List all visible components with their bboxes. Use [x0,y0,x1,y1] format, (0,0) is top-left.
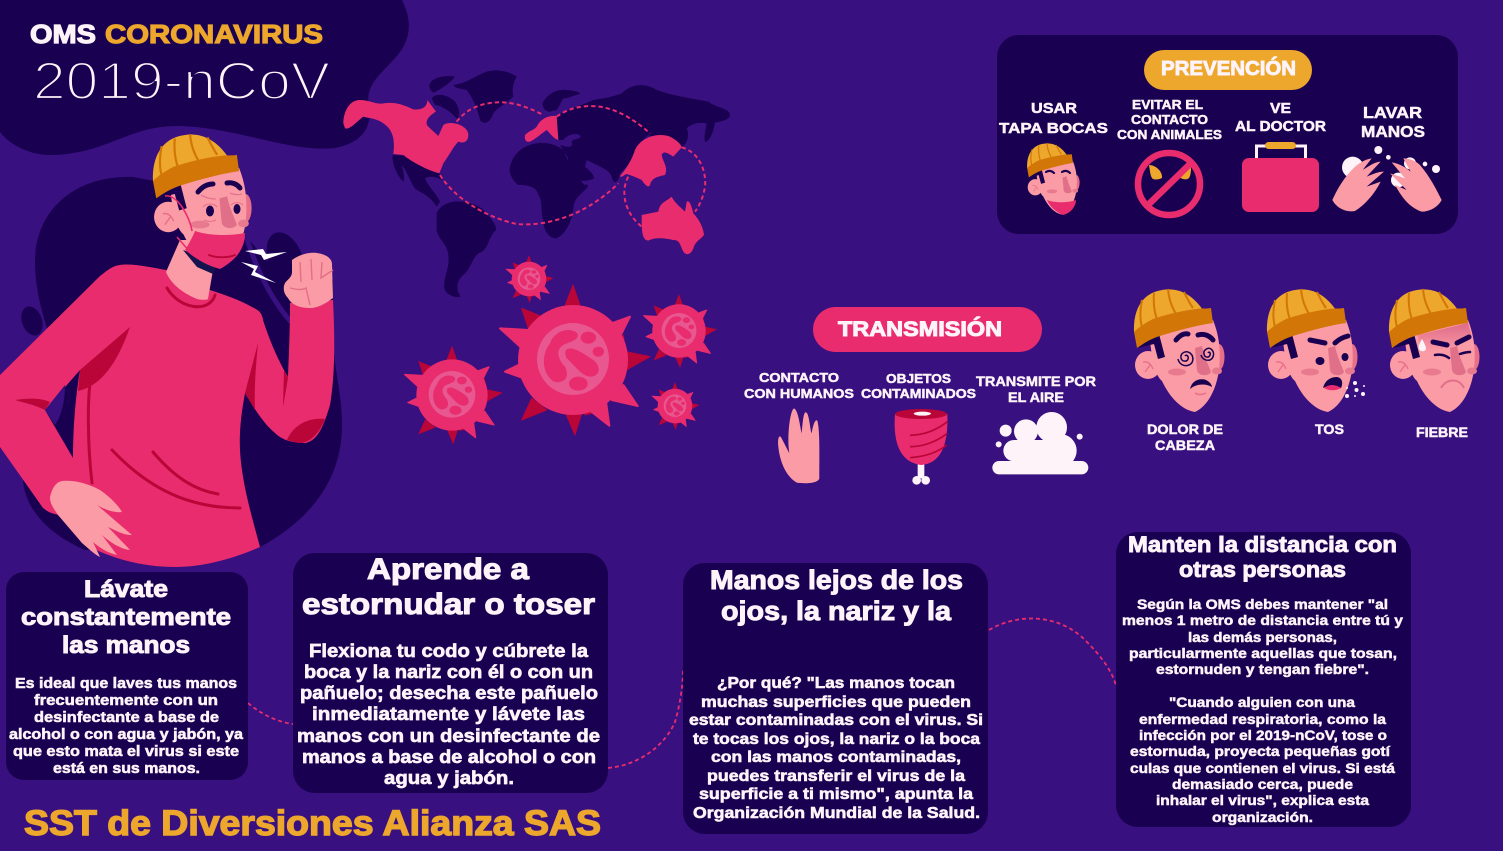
body text: "Cuando alguien con una [1169,694,1355,710]
dashed routes [440,102,705,227]
heading: ojos, la nariz y la [721,596,952,626]
panel: lávate las manos [6,572,248,780]
evitar contacto con animales [1117,97,1222,215]
footer credit: SST de Diversiones Alianza SAS [24,804,601,843]
neck [166,240,215,300]
panel: manos lejos [683,563,988,834]
lavar manos [1332,105,1442,212]
sweater [0,264,334,567]
body text: enfermedad respiratoria, como la [1139,711,1386,727]
contacto con humanos: CON HUMANOS [744,386,854,401]
usar tapa bocas: TAPA BOCAS [999,120,1108,137]
heading [21,576,231,659]
body text: particularmente aquellas que tosan, [1129,645,1397,661]
heading [710,565,963,626]
dark backdrop [23,177,342,550]
transmisión button [813,307,1042,352]
prevención button: PREVENCIÓN [1161,56,1296,80]
virus small top [506,255,553,303]
heading: Manos lejos de los [710,565,963,595]
body text: estar contaminadas con el virus. Si [689,712,983,729]
body text: boca y la nariz con él o con un [304,662,593,682]
ve al doctor: AL DOCTOR [1235,119,1327,135]
body text: Es ideal que laves tus manos [15,675,237,692]
infected regions [343,100,704,254]
heading [302,553,595,621]
body text: Flexiona tu codo y cúbrete la [309,641,589,661]
usar tapa bocas: USAR [1031,100,1077,117]
header blob [0,0,409,155]
body text: está en sus manos. [53,760,200,777]
title [30,19,331,111]
body text: que esto mata el virus si este [13,743,239,760]
body text: estornuden y tengan fiebre". [1156,661,1369,677]
heading: las manos [62,632,190,659]
mask [165,196,245,269]
body text: las demás personas, [1188,629,1337,645]
virus right [644,295,716,367]
panel: prevención [997,35,1458,234]
body text: inhalar el virus", explica esta [1156,792,1369,808]
body text: manos a base de alcohol o con [302,747,596,767]
objetos contaminados: CONTAMINADOS [861,386,976,401]
symptom: tos: TOS [1315,421,1344,437]
contacto con humanos [744,370,854,483]
body text [689,675,983,822]
body text: infección por el 2019-nCoV, tose o [1139,727,1387,743]
ve al doctor: VE [1270,101,1291,117]
body text: manos con un desinfectante de [297,726,600,746]
dark continents [393,70,730,297]
face details [198,183,243,222]
heading: constantemente [21,604,231,631]
body text: culas que contienen el virus. Si está [1130,760,1395,776]
body text: puedes transferir el virus de la [707,768,965,785]
body text: muchas superficies que pueden [701,694,971,711]
body text: demasiado cerca, puede [1172,776,1353,792]
ve al doctor [1235,101,1327,212]
viruses [405,255,716,444]
body text: organización. [1212,809,1313,825]
contacto con humanos: CONTACTO [759,370,839,385]
body text: te tocas los ojos, la nariz o la boca [693,731,980,748]
body text: pañuelo; desecha este pañuelo [300,683,598,703]
evitar contacto con animales: EVITAR EL [1132,97,1203,112]
heading: otras personas [1179,557,1346,582]
symptom: tos [1267,289,1365,437]
body text: frecuentemente con un [34,692,218,709]
hand on hip [50,481,132,557]
head [153,134,252,268]
symptom: dolor de cabeza: CABEZA [1155,437,1215,453]
title: 2019-nCoV [33,52,331,111]
panel: distancia [1116,532,1411,827]
transmite por el aire: EL AIRE [1008,389,1064,405]
objetos contaminados [861,371,976,485]
body text [9,675,244,777]
lavar manos: LAVAR [1363,105,1422,122]
body text: ¿Por qué? "Las manos tocan [717,675,955,692]
transmisión button: TRANSMISIÓN [838,317,1002,341]
heading [1128,532,1397,582]
virus large [500,285,650,435]
panel: estornudar o toser [293,553,608,793]
character coughing [0,134,342,567]
heading: Aprende a [367,553,529,586]
title: OMS [30,19,96,49]
title: CORONAVIRUS [105,19,323,49]
body text: alcohol o con agua y jabón, ya [9,726,244,743]
objetos contaminados: OBJETOS [886,371,951,386]
symptom: fiebre: FIEBRE [1416,424,1468,440]
body text: Organización Mundial de la Salud. [693,805,980,822]
body text [297,641,600,788]
body text: estornuda, proyecta pequeñas gotí [1130,743,1391,759]
dashed connectors [248,619,1116,768]
transmite por el aire [976,373,1096,474]
body text: desinfectante a base de [34,709,219,726]
symptom: dolor de cabeza [1134,289,1224,453]
evitar contacto con animales: CON ANIMALES [1117,127,1222,142]
raised fist [284,253,333,308]
virus bottom left [405,346,502,444]
evitar contacto con animales: CONTACTO [1131,112,1208,127]
body text [1122,596,1403,825]
heading: Manten la distancia con [1128,532,1397,557]
sweater folds [15,327,325,443]
lavar manos: MANOS [1361,124,1425,141]
symptom: dolor de cabeza: DOLOR DE [1147,421,1223,437]
symptom: fiebre [1389,289,1480,440]
body text: agua y jabón. [384,768,514,788]
virus bottom right [652,382,699,430]
body text: superficie a ti mismo", apunta la [699,786,973,803]
body text: inmediatamente y lávete las [312,704,585,724]
body text: Según la OMS debes mantener "al [1137,596,1388,612]
cough sparks [241,249,287,283]
heading: estornudar o toser [302,588,595,621]
usar tapa bocas [999,100,1108,215]
prevención button [1144,50,1312,90]
transmite por el aire: TRANSMITE POR [976,373,1096,389]
world map [343,70,730,297]
heading: Lávate [84,576,168,603]
body text: con las manos contaminadas, [711,749,961,766]
body text: menos 1 metro de distancia entre tú y [1122,612,1403,628]
